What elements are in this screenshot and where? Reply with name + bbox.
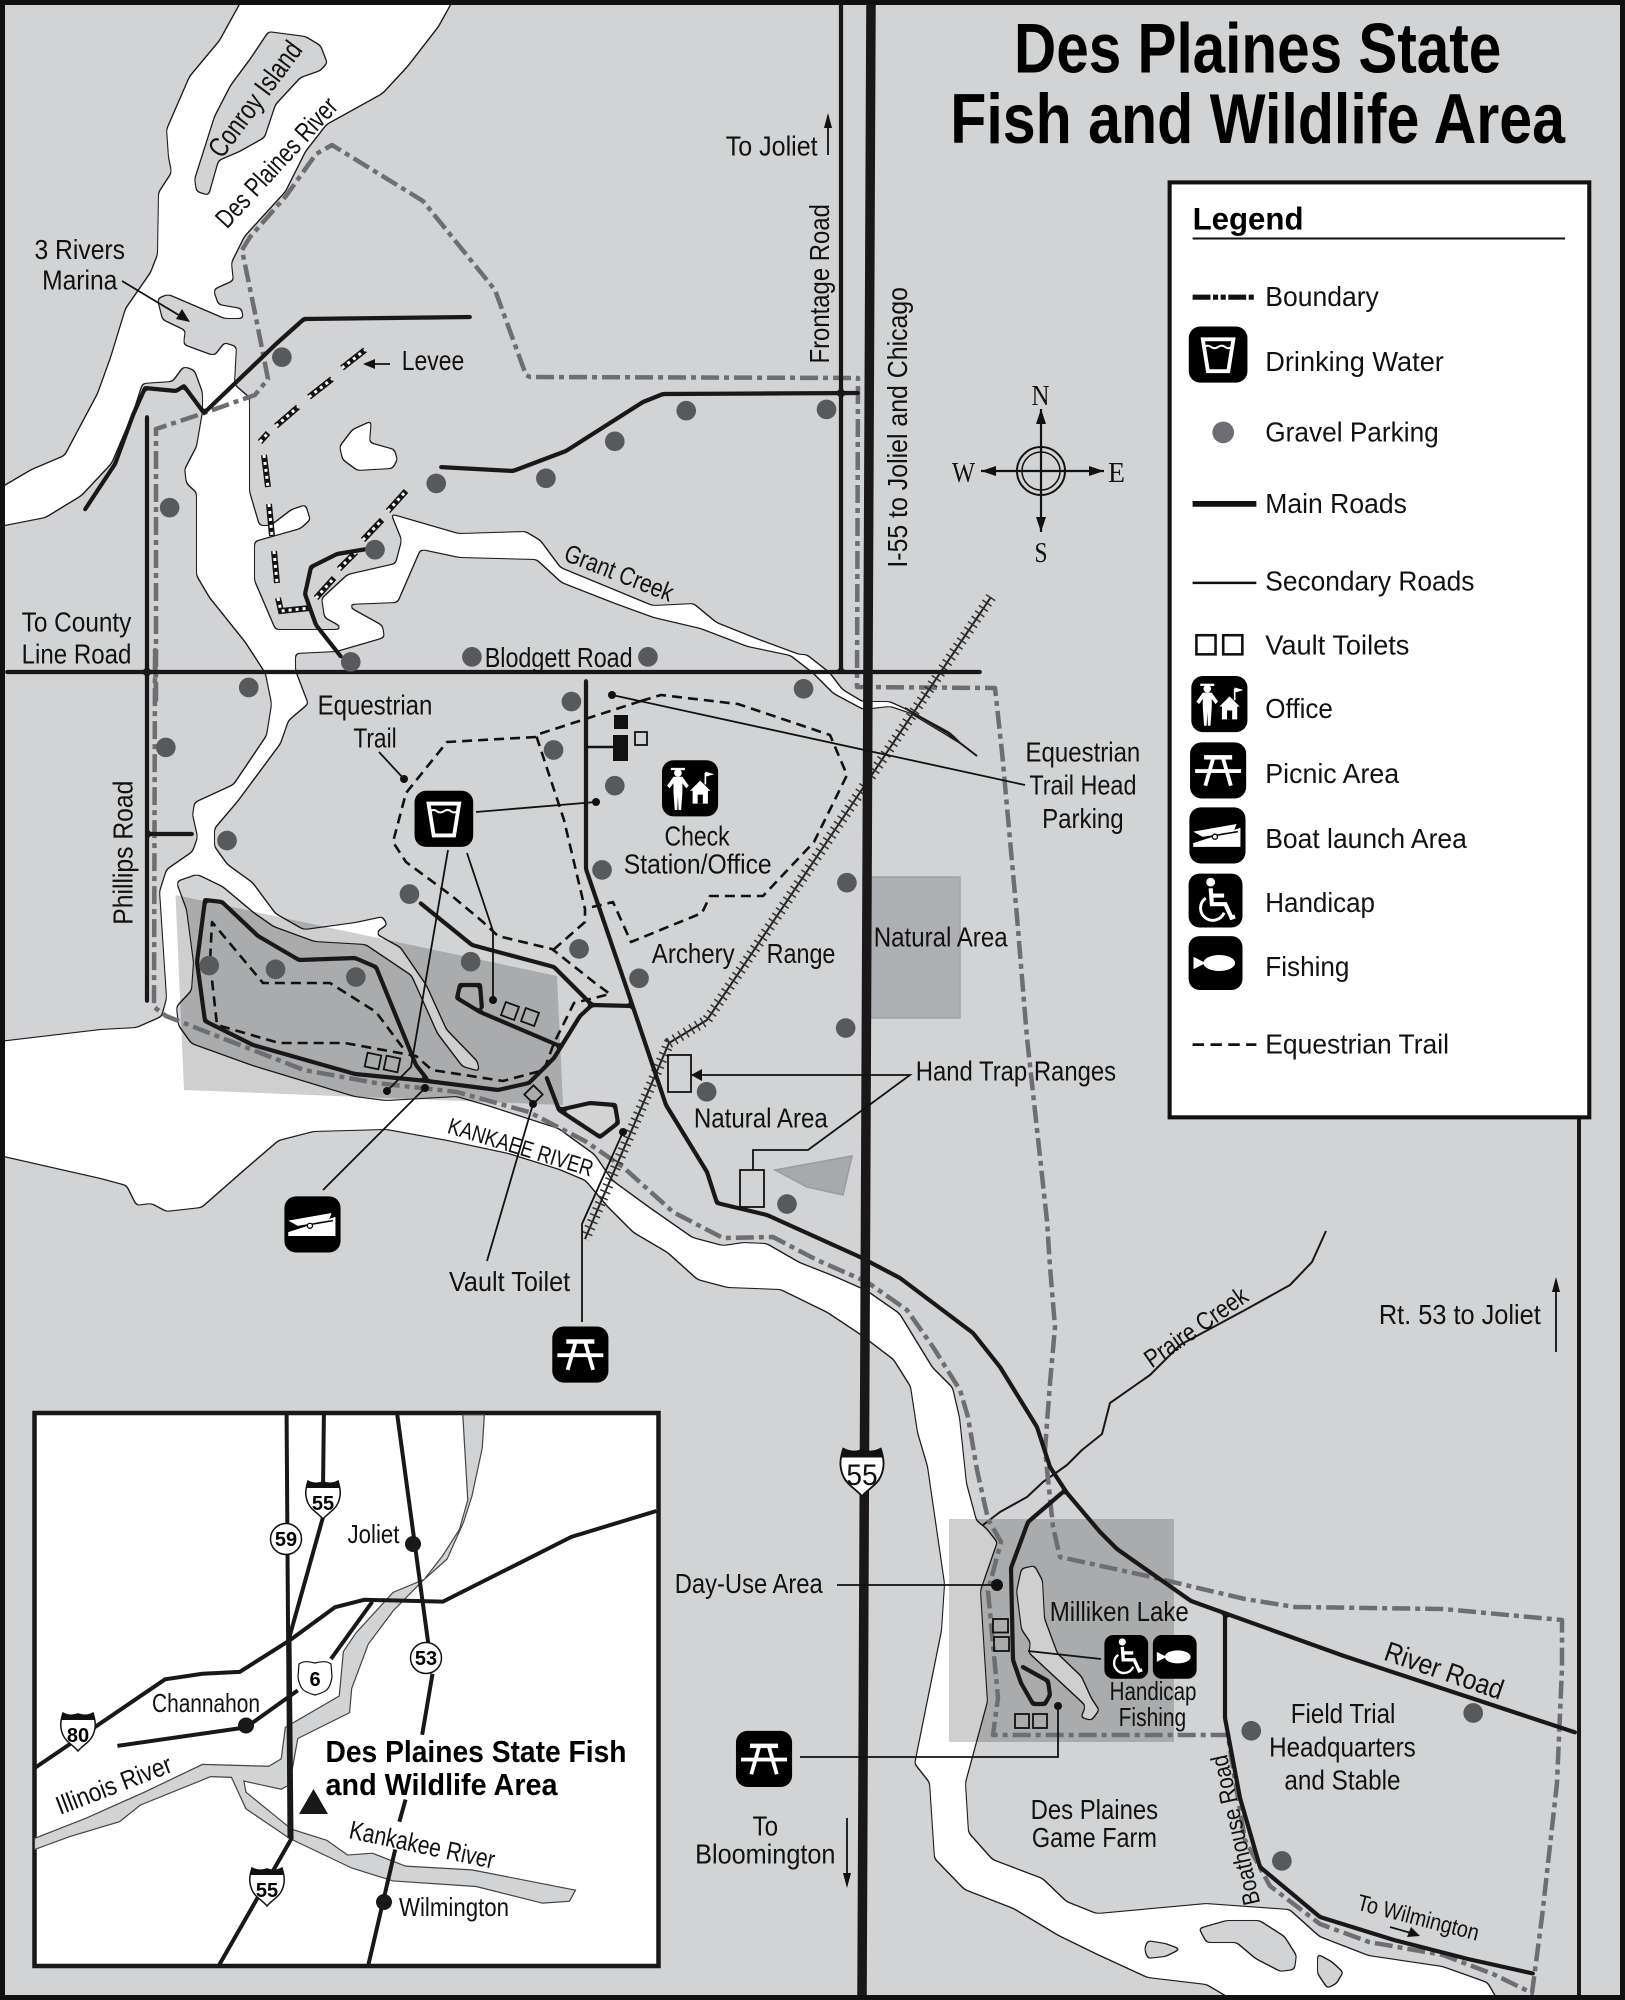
inset labels: Kankakee River: [347, 1815, 498, 1875]
icon: boat launch: [284, 1196, 341, 1253]
label: Grant Creek: Grant Creek: [560, 539, 678, 607]
inset route shields: 55: [312, 1493, 334, 1515]
icon: fishing: [1153, 1635, 1197, 1679]
label: Frontage Road: Frontage Road: [804, 204, 835, 364]
legend: equestrian trail: Equestrian Trail: [1265, 1029, 1449, 1060]
label: Archery Range: Archery: [652, 938, 735, 969]
legend: boundary: Boundary: [1265, 281, 1379, 312]
label: Levee: Levee: [402, 345, 464, 376]
legend: fishing: Fishing: [1265, 951, 1349, 982]
inset labels: Illinois River: [51, 1749, 176, 1821]
Milliken Lake: [1016, 1565, 1100, 1721]
compass rose: E: [1108, 458, 1125, 489]
label: Des Plaines Game Farm: Game Farm: [1032, 1822, 1157, 1853]
inset route shields: 59: [275, 1529, 297, 1551]
label: Day-Use Area: Day-Use Area: [675, 1568, 823, 1599]
icon: drinking water: [415, 791, 473, 847]
label: Conroy Island: Conroy Island: [202, 35, 308, 163]
inset labels: Wilmington: [399, 1892, 509, 1922]
label: 3 Rivers Marina: [34, 234, 125, 296]
label: Equestrian Trail Head Parking: Trail Head: [1029, 770, 1136, 801]
label: 3 Rivers Marina: Marina: [42, 265, 118, 296]
label: I-55 to Joliet and Chicago: I-55 to Joliel and Chicago: [882, 287, 913, 568]
label: Equestrian Trail: Trail: [353, 722, 397, 753]
legend: office: [1191, 676, 1333, 732]
label: To Wilmington: To Wilmington: [1355, 1889, 1482, 1946]
label: To County Line Road: To County: [22, 606, 131, 637]
label: Rt. 53 to Joliet: Rt. 53 to Joliet: [1379, 1299, 1541, 1330]
label: Archery Range: [652, 938, 835, 969]
legend: fishing: [1189, 936, 1349, 990]
label: Milliken Lake: Milliken Lake: [1050, 1596, 1189, 1627]
inset route shields: [61, 1481, 442, 1906]
label: Archery Range: Range: [767, 938, 835, 969]
legend: handicap: Handicap: [1265, 887, 1375, 918]
label: Des Plaines Game Farm: Des Plaines: [1031, 1794, 1158, 1825]
label: Praire Creek: Praire Creek: [1139, 1282, 1254, 1374]
map icons: [284, 760, 1197, 1787]
label: Des Plaines Game Farm: [1031, 1794, 1158, 1853]
label: Field Trial Headquarters and Stable: [1269, 1698, 1416, 1796]
natural area block: [870, 877, 960, 1018]
levee segments: [260, 350, 406, 611]
label: Field Trial Headquarters and Stable: and Stable: [1284, 1765, 1400, 1796]
label: To County Line Road: Line Road: [22, 638, 131, 669]
right side road edge: [1577, 1110, 1581, 2000]
icon: picnic area: [552, 1327, 608, 1383]
inset route shields: 55: [256, 1880, 278, 1902]
legend: secondary roads: Secondary Roads: [1265, 566, 1474, 597]
river islands: [1144, 1920, 1344, 1989]
legend: vault toilets: Vault Toilets: [1265, 629, 1409, 660]
label: To Bloomington: [695, 1810, 835, 1870]
legend: picnic area: Picnic Area: [1265, 758, 1400, 789]
label: Boathouse Road: Boathouse Road: [1206, 1752, 1266, 1908]
I-55 highway: [862, 0, 871, 2000]
legend: office: Office: [1265, 693, 1333, 724]
label: Hand Trap Ranges: Hand Trap Ranges: [916, 1055, 1116, 1086]
compass rose: S: [1034, 538, 1048, 569]
label: Natural Area north: Natural Area: [874, 921, 1008, 952]
label: Check Station/Office: Check: [665, 821, 730, 852]
legend: drinking water: [1189, 327, 1444, 383]
inset rivers and roads: [35, 1415, 656, 1965]
inset labels: and Wildlife Area: [326, 1767, 558, 1802]
equestrian trail head building: [613, 715, 628, 761]
I-55 shield: [840, 1449, 884, 1496]
label: Handicap Fishing: [1110, 1678, 1196, 1732]
panel: legend: [1170, 182, 1589, 1117]
label: Field Trial Headquarters and Stable: Headquarters: [1269, 1731, 1416, 1762]
legend: drinking water: Drinking Water: [1265, 346, 1444, 377]
title: Des Plaines State: [1014, 9, 1501, 88]
inset route shields: 80: [67, 1725, 89, 1747]
Grant Creek eastern tip: [905, 708, 977, 756]
legend: picnic area: [1190, 742, 1400, 798]
inset labels: [51, 1519, 626, 1922]
vault toilets and facility markers: [365, 732, 1047, 1728]
label: Equestrian Trail Head Parking: Parking: [1042, 803, 1124, 834]
compass rose: [952, 381, 1125, 569]
title: [950, 9, 1566, 158]
icon: picnic area at lake: [736, 1731, 792, 1787]
panel: locator inset map: [34, 1413, 658, 1966]
label: Equestrian Trail: Equestrian: [318, 689, 432, 720]
label: Phillips Road: Phillips Road: [108, 781, 139, 925]
small pond: [339, 420, 398, 471]
label: Equestrian Trail Head Parking: Equestrian: [1026, 736, 1140, 767]
Prairie Creek: [983, 1231, 1326, 1525]
label: Handicap Fishing: Fishing: [1119, 1704, 1186, 1732]
legend: vault toilets: [1196, 629, 1409, 660]
Conroy Island: [194, 31, 328, 196]
shaded use area: Milliken Lake: [949, 1519, 1174, 1742]
label: Equestrian Trail Head Parking: [1026, 736, 1140, 834]
legend: boat launch area: [1189, 807, 1467, 864]
hand trap range wedge: [775, 1156, 852, 1195]
label: Field Trial Headquarters and Stable: Field Trial: [1291, 1698, 1395, 1729]
inset route shields: 6: [309, 1669, 321, 1691]
label: To Joliet: To Joliet: [726, 131, 818, 162]
legend heading: Legend: [1193, 201, 1304, 237]
label: Handicap Fishing: Handicap: [1110, 1678, 1196, 1706]
icon: office: [662, 760, 718, 816]
inset city dots and triangle: [238, 1536, 421, 1910]
inset labels: Des Plaines State Fish: [326, 1734, 626, 1769]
label: To Bloomington: Bloomington: [695, 1839, 835, 1870]
compass rose: W: [952, 458, 975, 489]
legend: main roads: Main Roads: [1265, 488, 1407, 519]
shaded use area: Kankakee peninsula: [176, 895, 563, 1105]
label: Natural Area south: Natural Area: [694, 1103, 828, 1134]
label: Vault Toilet: Vault Toilet: [449, 1266, 570, 1297]
inset labels: Joliet: [348, 1519, 400, 1549]
compass rose: N: [1032, 381, 1050, 412]
label: River Road: River Road: [1381, 1636, 1508, 1705]
label: Check Station/Office: [624, 821, 772, 880]
inset route shields: 53: [415, 1648, 437, 1670]
inset labels: Channahon: [152, 1688, 260, 1718]
label: 3 Rivers Marina: 3 Rivers: [34, 234, 125, 265]
label: Blodgett Road: Blodgett Road: [485, 642, 633, 673]
label: Equestrian Trail: [318, 689, 432, 753]
equestrian trails: [210, 695, 847, 1081]
label: Kankakee River: KANKAEE RIVER: [445, 1113, 596, 1181]
icon: handicap: [1104, 1635, 1148, 1679]
railroad: [585, 597, 991, 1239]
legend: gravel parking: Gravel Parking: [1265, 416, 1439, 447]
legend: handicap: [1189, 874, 1375, 927]
label: Des Plaines River: Des Plaines River: [209, 91, 344, 234]
label: To Bloomington: To: [753, 1810, 778, 1841]
label: Check Station/Office: Station/Office: [624, 849, 772, 880]
legend: boat launch area: Boat launch Area: [1265, 823, 1467, 854]
I-55 shield: 55: [846, 1459, 878, 1492]
gravel parking dots: [156, 347, 1483, 1871]
label: To County Line Road: [22, 606, 131, 669]
